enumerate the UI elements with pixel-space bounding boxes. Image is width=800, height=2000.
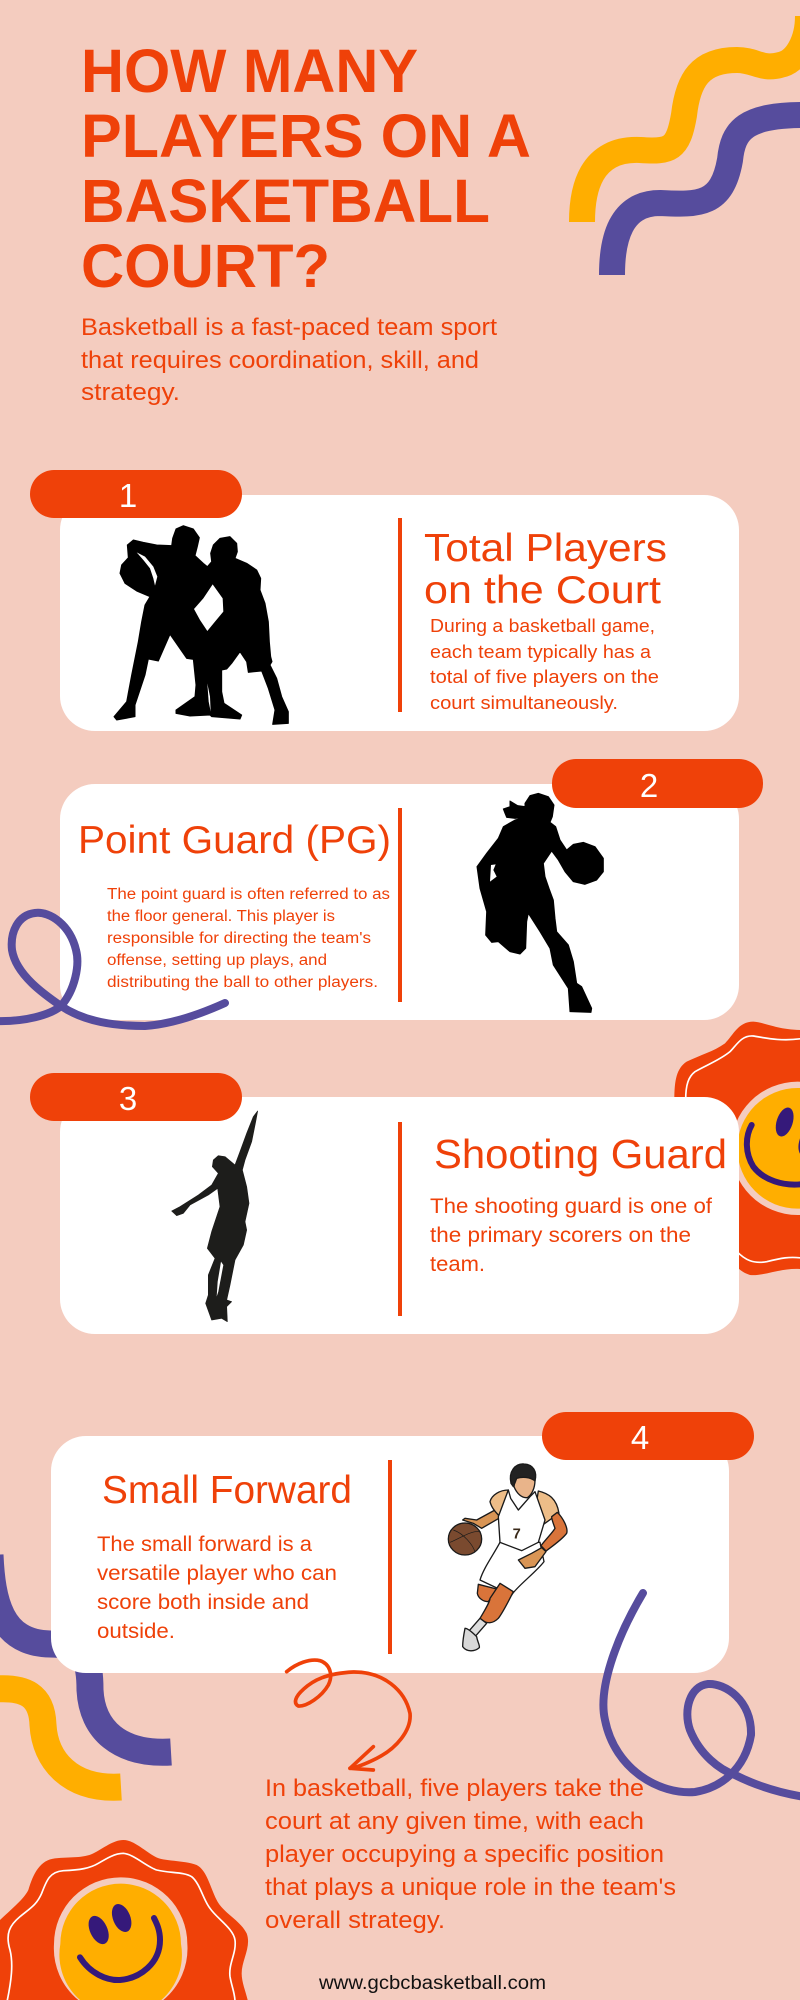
panel: point guard bbox=[60, 759, 763, 1020]
title: PLAYERS ON A bbox=[81, 102, 531, 170]
body text: distributing the ball to other players. bbox=[107, 974, 378, 991]
closing text: court at any given time, with each bbox=[265, 1808, 644, 1835]
body text: team. bbox=[430, 1253, 485, 1276]
body text: The shooting guard is one of bbox=[430, 1195, 712, 1218]
body text bbox=[107, 886, 390, 991]
arrow: curly orange arrow to closing text bbox=[287, 1660, 410, 1770]
number badge 4: 4 bbox=[631, 1419, 649, 1456]
website url: www.gcbcbasketball.com bbox=[318, 1973, 546, 1994]
body text bbox=[430, 1195, 712, 1276]
number badge 1 bbox=[30, 470, 242, 518]
icon: illustrated dribbling player: 7 bbox=[513, 1526, 521, 1542]
title: COURT? bbox=[81, 232, 330, 300]
card background bbox=[60, 784, 739, 1020]
panel: total players on the court bbox=[30, 470, 739, 731]
icon: dribbling player silhouette bbox=[477, 793, 603, 1012]
intro text: strategy. bbox=[81, 379, 180, 406]
heading: Total Players bbox=[424, 527, 667, 570]
body text: offense, setting up plays, and bbox=[107, 952, 327, 969]
body text: The point guard is often referred to as bbox=[107, 886, 390, 903]
body text: score both inside and bbox=[97, 1591, 309, 1614]
icon: illustrated dribbling player bbox=[448, 1464, 567, 1651]
title bbox=[81, 37, 531, 300]
divider bbox=[388, 1460, 392, 1654]
closing text: overall strategy. bbox=[265, 1907, 445, 1934]
panel: small forward bbox=[51, 1412, 754, 1673]
body text: During a basketball game, bbox=[430, 615, 655, 636]
closing text: player occupying a specific position bbox=[265, 1841, 664, 1868]
number badge 3 bbox=[30, 1073, 242, 1121]
decoration: yellow squiggle bottom left bbox=[0, 1689, 121, 1787]
heading: Point Guard (PG) bbox=[78, 819, 391, 862]
heading bbox=[424, 527, 667, 612]
body text: the floor general. This player is bbox=[107, 908, 335, 925]
icon: two players silhouette bbox=[114, 526, 288, 724]
divider bbox=[398, 518, 402, 712]
closing text bbox=[265, 1775, 676, 1934]
body text: total of five players on the bbox=[430, 666, 659, 687]
number badge 2 bbox=[552, 759, 763, 808]
decoration: smiley badge top right bbox=[674, 1022, 800, 1275]
body text: court simultaneously. bbox=[430, 692, 618, 713]
intro text bbox=[81, 314, 497, 406]
body text: outside. bbox=[97, 1620, 175, 1643]
decoration: yellow squiggle top right bbox=[582, 16, 800, 222]
title: BASKETBALL bbox=[81, 167, 490, 235]
decoration: purple swirl over card 2 bbox=[0, 913, 225, 1026]
card background bbox=[60, 495, 739, 731]
body text: the primary scorers on the bbox=[430, 1224, 691, 1247]
closing text: that plays a unique role in the team's bbox=[265, 1874, 676, 1901]
body text: The small forward is a bbox=[97, 1533, 312, 1556]
card background bbox=[51, 1436, 729, 1673]
number badge 1: 1 bbox=[119, 477, 137, 514]
icon: jumping player silhouette bbox=[172, 1111, 258, 1322]
heading: Small Forward bbox=[102, 1469, 352, 1512]
decoration: purple swirl bottom right bbox=[603, 1593, 800, 1797]
decoration: purple squiggle top right bbox=[612, 115, 800, 275]
decoration: purple squiggle bottom left bbox=[0, 1555, 171, 1752]
card background bbox=[60, 1097, 739, 1334]
number badge 3: 3 bbox=[119, 1080, 137, 1117]
intro text: Basketball is a fast-paced team sport bbox=[81, 314, 497, 341]
body text: each team typically has a bbox=[430, 641, 652, 662]
number badge 2: 2 bbox=[640, 767, 658, 804]
body text: responsible for directing the team's bbox=[107, 930, 371, 947]
number badge 4 bbox=[542, 1412, 754, 1460]
title: HOW MANY bbox=[81, 37, 418, 105]
panel: shooting guard bbox=[30, 1073, 739, 1334]
body text bbox=[97, 1533, 337, 1643]
body text bbox=[430, 615, 659, 713]
divider bbox=[398, 808, 402, 1002]
divider bbox=[398, 1122, 402, 1316]
heading: Shooting Guard bbox=[434, 1131, 727, 1177]
intro text: that requires coordination, skill, and bbox=[81, 347, 479, 374]
body text: versatile player who can bbox=[97, 1562, 337, 1585]
decoration: smiley badge bottom left bbox=[0, 1840, 248, 2000]
closing text: In basketball, five players take the bbox=[265, 1775, 644, 1802]
heading: on the Court bbox=[424, 569, 661, 612]
